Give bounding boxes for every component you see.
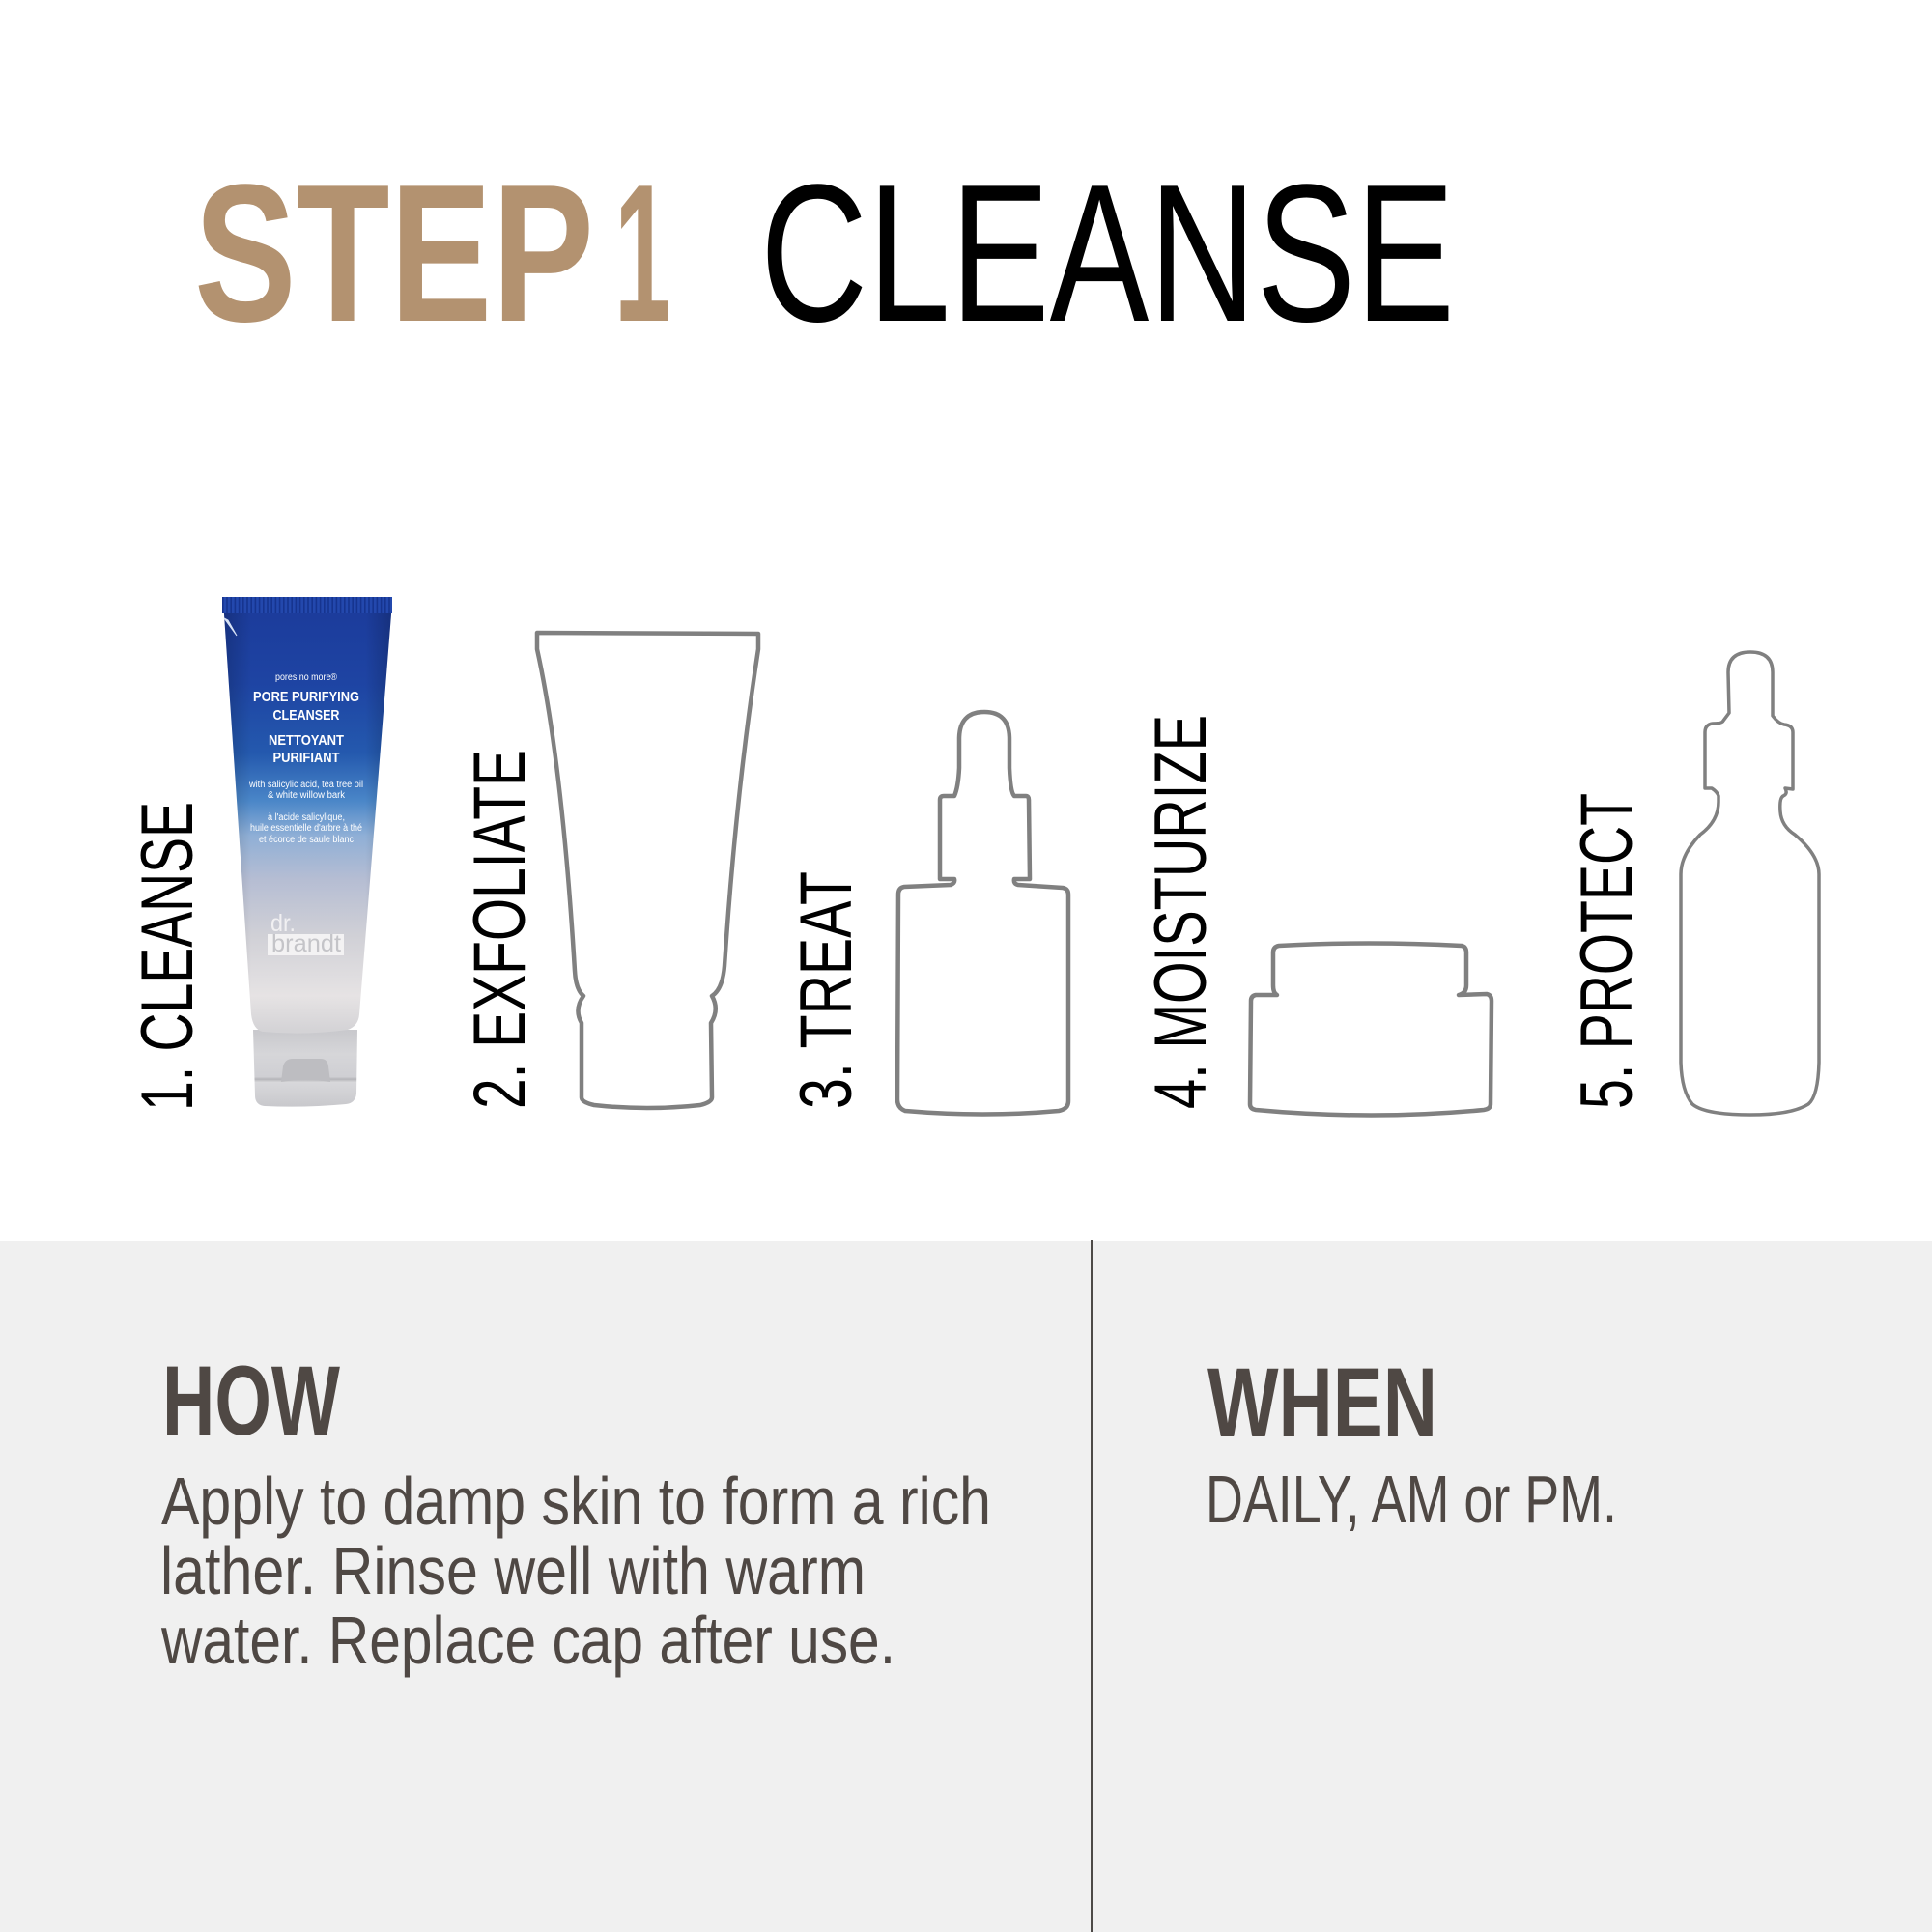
product: pore purifying cleanser tube [222, 597, 392, 1107]
outline: tube [537, 633, 758, 1108]
step row [127, 597, 1819, 1115]
label: 5. protect: 5. PROTECT [1566, 793, 1648, 1109]
how line 2: lather. Rinse well with warm [160, 1533, 866, 1608]
outline: dropper bottle [897, 712, 1068, 1115]
product name english: PORE PURIFYING [253, 689, 359, 705]
how line 3: water. Replace cap after use. [160, 1603, 895, 1678]
divider [1091, 1240, 1093, 1932]
panel: how [0, 1241, 1092, 1932]
ingredients english: with salicylic acid, tea tree oil [248, 780, 363, 790]
tube crimp [222, 597, 392, 613]
label: 4. moisturize: 4. MOISTURIZE [1140, 715, 1222, 1109]
tube shading [222, 597, 392, 1034]
label: 2. exfoliate: 2. EXFOLIATE [459, 750, 541, 1109]
heading: when: WHEN [1208, 1348, 1437, 1458]
product name french line 2: PURIFIANT [272, 750, 340, 766]
heading: how: HOW [162, 1346, 341, 1456]
ingredients english line 2: & white willow bark [268, 790, 346, 801]
tube cap [253, 1030, 357, 1107]
outline: serum bottle [1681, 652, 1819, 1115]
when line: DAILY, AM or PM. [1206, 1462, 1617, 1537]
product name english line 2: CLEANSER [272, 707, 340, 724]
label: 1. cleanse: 1. CLEANSE [127, 802, 209, 1111]
brand logo [268, 910, 344, 957]
brand line: pores no more® [275, 672, 338, 683]
title: step word: STEP [194, 144, 594, 363]
outline: jar [1250, 943, 1492, 1115]
cap nub [281, 1059, 330, 1082]
tube body [222, 597, 392, 1034]
ingredients french: à l'acide salicylique, [268, 812, 345, 823]
when text block [1206, 1348, 1617, 1537]
ingredients french line 2: huile essentielle d'arbre à thé [250, 823, 362, 834]
ingredients french line 3: et écorce de saule blanc [259, 835, 354, 845]
logo box [268, 934, 344, 955]
product name french: NETTOYANT [269, 732, 344, 749]
title [194, 144, 1455, 363]
title: step name: CLEANSE [760, 144, 1455, 363]
how line 1: Apply to damp skin to form a rich [161, 1463, 991, 1539]
label: 3. treat: 3. TREAT [785, 871, 867, 1109]
tube highlight [224, 618, 237, 636]
tube label text [248, 672, 363, 845]
crimp ridges [222, 597, 392, 613]
logo dr: dr. [270, 910, 296, 937]
logo brandt: brandt [271, 930, 341, 957]
panel: when [1092, 1241, 1932, 1932]
title: step number: 1 [614, 144, 670, 363]
how text block [160, 1346, 991, 1678]
